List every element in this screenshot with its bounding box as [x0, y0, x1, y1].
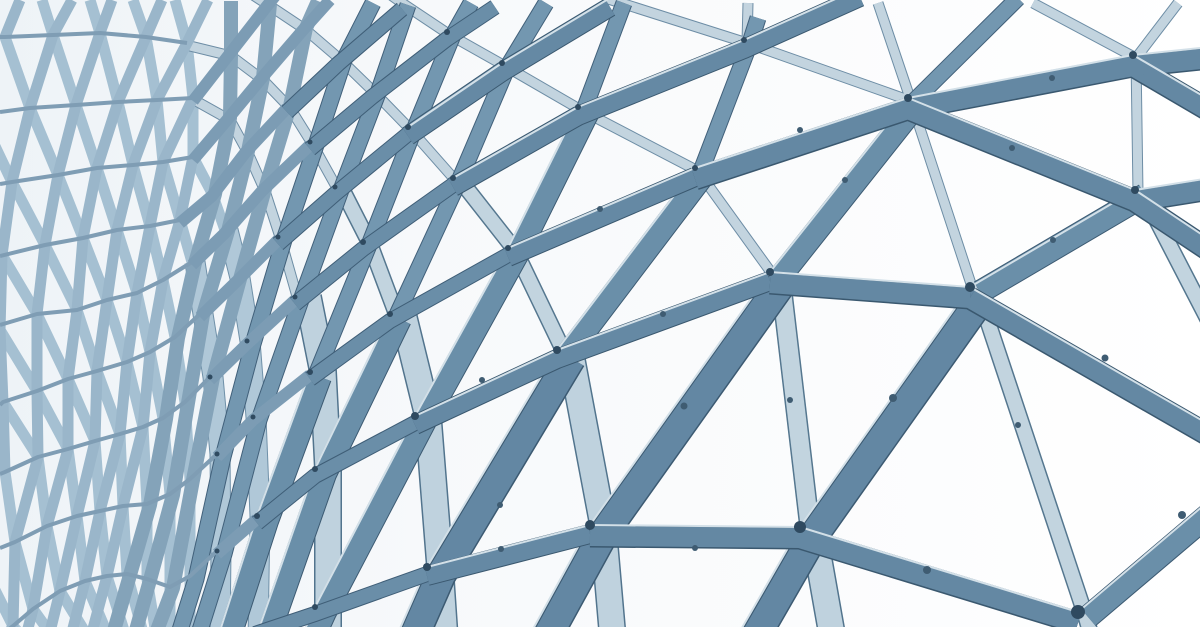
bolts: small rivets along beams [479, 75, 1186, 574]
joints: dark node hubs [208, 29, 1139, 619]
